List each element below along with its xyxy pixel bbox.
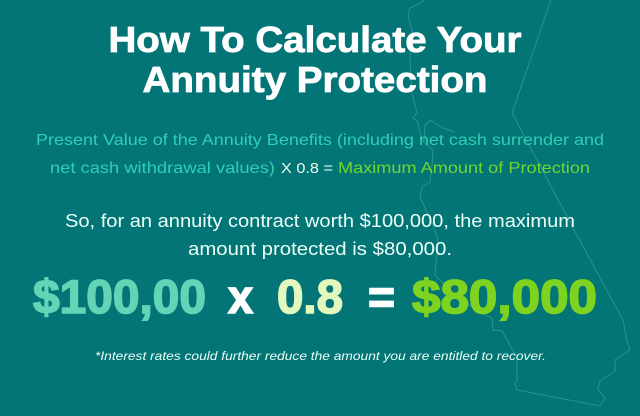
example explanation: amount protected is $80,000. bbox=[188, 238, 452, 259]
formula text: net cash withdrawal values) bbox=[50, 160, 275, 177]
title bbox=[108, 19, 522, 100]
calculation equation: $80,000 bbox=[412, 270, 597, 323]
example explanation bbox=[65, 210, 575, 259]
calculation equation: = bbox=[368, 270, 395, 323]
title: Annuity Protection bbox=[142, 59, 488, 100]
footnote: *Interest rates could further reduce the amount you are entitled to recover. bbox=[95, 349, 546, 363]
formula text: X 0.8 = bbox=[281, 160, 333, 177]
calculation equation: 0.8 bbox=[277, 270, 343, 323]
calculation equation bbox=[33, 270, 597, 323]
calculation equation: x bbox=[228, 270, 253, 323]
California state outline bbox=[408, 0, 630, 406]
title: How To Calculate Your bbox=[108, 19, 522, 60]
formula text: Maximum Amount of Protection bbox=[338, 160, 590, 177]
example explanation: So, for an annuity contract worth $100,000, the maximum bbox=[65, 210, 575, 231]
formula text bbox=[36, 132, 604, 177]
calculation equation: $100,00 bbox=[33, 270, 206, 323]
formula text: Present Value of the Annuity Benefits (including net cash surrender and bbox=[36, 132, 604, 149]
